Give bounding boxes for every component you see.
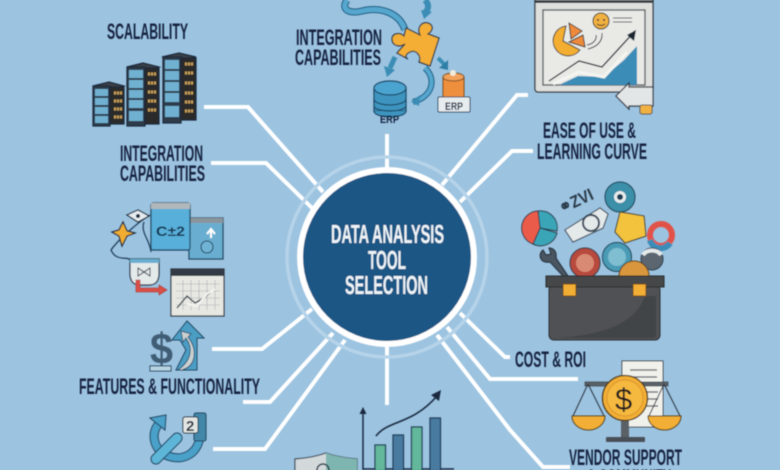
hub title: TOOL [368, 245, 406, 275]
heading: Integration Capabilities (top): CAPABILITIES [295, 45, 381, 70]
icon: loop arrows with badge [150, 413, 206, 459]
icon: puzzle piece with integration arrows [345, 0, 470, 126]
icon: dollar and growth arrow [150, 321, 204, 374]
heading: Vendor Support & Community [569, 445, 682, 470]
heading: Scalability: SCALABILITY [107, 19, 188, 44]
heading: Vendor Support & Community: VENDOR SUPPORT [569, 445, 682, 470]
orange cylinder [443, 70, 464, 99]
heading: Ease of Use & Learning Curve [537, 118, 647, 164]
icon: balance scale with coin [572, 361, 681, 442]
heading: Ease of Use & Learning Curve: LEARNING CURVE [537, 139, 647, 164]
heading: Integration Capabilities (left): INTEGRATION [120, 141, 203, 166]
dollar glyph: $ [150, 325, 173, 374]
database cylinder [374, 81, 406, 117]
hub title: SELECTION [345, 270, 428, 300]
hub title [331, 219, 444, 300]
icon: bar chart with growth arrow and shield [295, 390, 454, 470]
icon: server towers [93, 53, 196, 126]
window code label: C±2 [156, 223, 185, 239]
floating glyphs: ⚭ZVI [556, 185, 596, 217]
connector lines [204, 95, 578, 467]
badge number: 2 [186, 418, 194, 435]
heading: Integration Capabilities (left) [120, 141, 205, 186]
heading: Integration Capabilities (left): CAPABILITIES [120, 161, 205, 186]
database label: ERP [380, 114, 399, 126]
heading: Cost & ROI: COST & ROI [515, 347, 586, 372]
central hub: Data Analysis Tool Selection [287, 157, 487, 357]
heading: Integration Capabilities (top) [295, 25, 382, 70]
coin dollar sign: $ [615, 382, 632, 417]
heading: Ease of Use & Learning Curve: EASE OF USE & [543, 118, 636, 143]
ERP box: ERP [445, 101, 463, 113]
artwork layer [79, 0, 682, 470]
icon: dashboard window with learning curve [535, 0, 653, 114]
hub title: DATA ANALYSIS [331, 219, 444, 249]
icon: toolbox with tools [522, 182, 672, 340]
icon: code windows and chart cluster [111, 203, 224, 316]
heading: Features & Functionality: FEATURES & FUNCTIONALITY [79, 374, 260, 399]
heading: Integration Capabilities (top): INTEGRATION [296, 25, 382, 50]
